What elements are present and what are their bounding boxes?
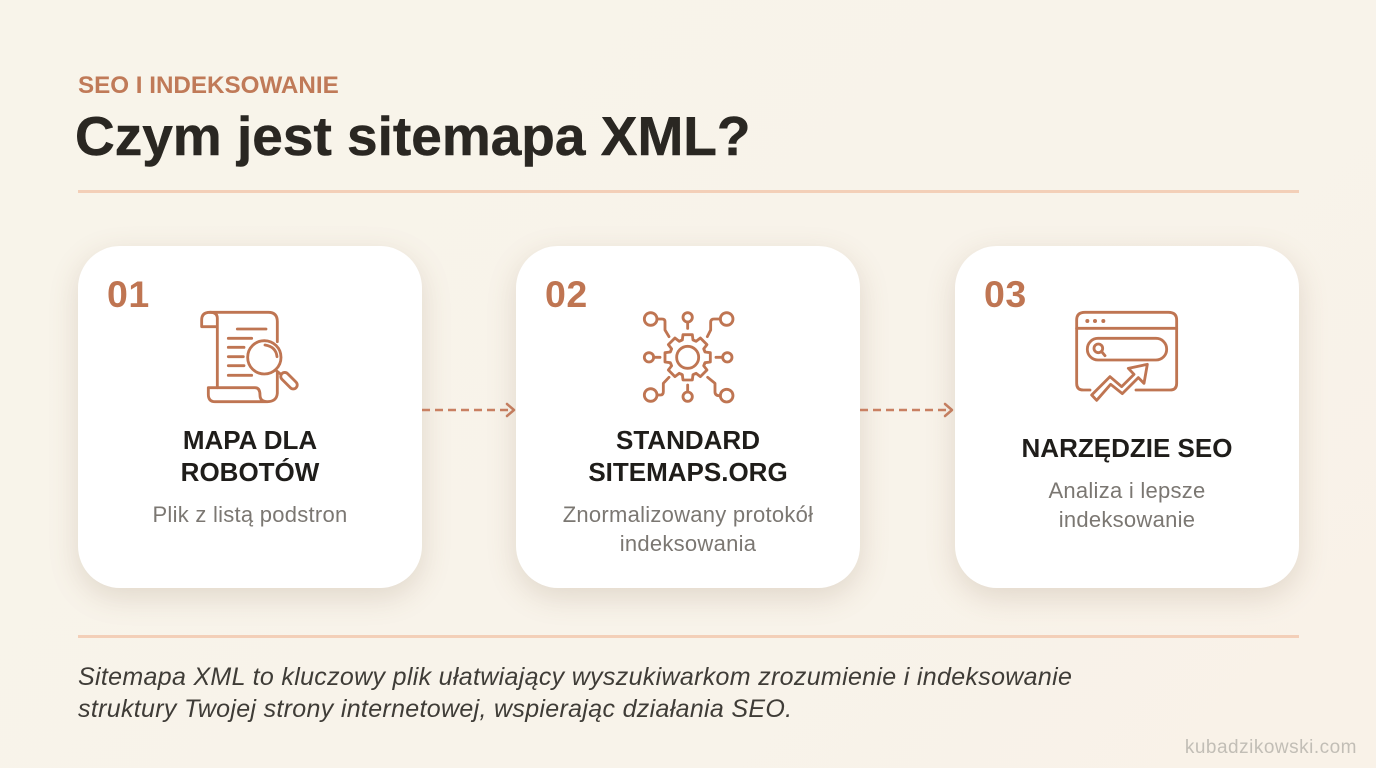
description (1048, 478, 1206, 532)
heading: mapa dla robotów (181, 425, 320, 487)
description: Znormalizowany protokół (563, 502, 813, 527)
panel: card 01 (78, 246, 422, 588)
number 01: 01 (107, 272, 150, 314)
icon: document with magnifier (200, 310, 299, 404)
description: indeksowania (620, 531, 756, 556)
title: Czym jest sitemapa XML? (75, 105, 750, 167)
description: Plik z listą podstron (152, 502, 347, 527)
number 03: 03 (984, 272, 1027, 314)
heading: mapa dla robotów: ROBOTÓW (181, 457, 319, 487)
arrow 2 to 3 (860, 402, 954, 418)
icon: gear network (642, 311, 734, 404)
arrow 1 to 2 (422, 402, 516, 418)
summary text (78, 663, 1072, 723)
eyebrow label: SEO I INDEKSOWANIE (78, 72, 339, 99)
panel: card 02 (516, 246, 860, 588)
description: Analiza i lepsze (1048, 478, 1206, 503)
heading: mapa dla robotów: MAPA DLA (183, 425, 317, 455)
summary text: Sitemapa XML to kluczowy plik ułatwiający wyszukiwarkom zrozumienie i indeksowanie (78, 663, 1072, 691)
heading: standard sitemaps.org: SITEMAPS.ORG (588, 457, 788, 487)
heading: narzędzie seo: NARZĘDZIE SEO (1022, 433, 1232, 463)
description (563, 502, 813, 556)
heading: standard sitemaps.org: STANDARD (616, 425, 760, 455)
panel: card 03 (955, 246, 1299, 588)
number 02: 02 (545, 272, 588, 314)
icon: browser search with growth arrow (1075, 310, 1178, 402)
description: indeksowanie (1059, 507, 1195, 532)
watermark: kubadzikowski.com (1185, 737, 1357, 758)
heading: standard sitemaps.org (588, 425, 788, 487)
summary text: struktury Twojej strony internetowej, wspierając działania SEO. (78, 695, 792, 723)
